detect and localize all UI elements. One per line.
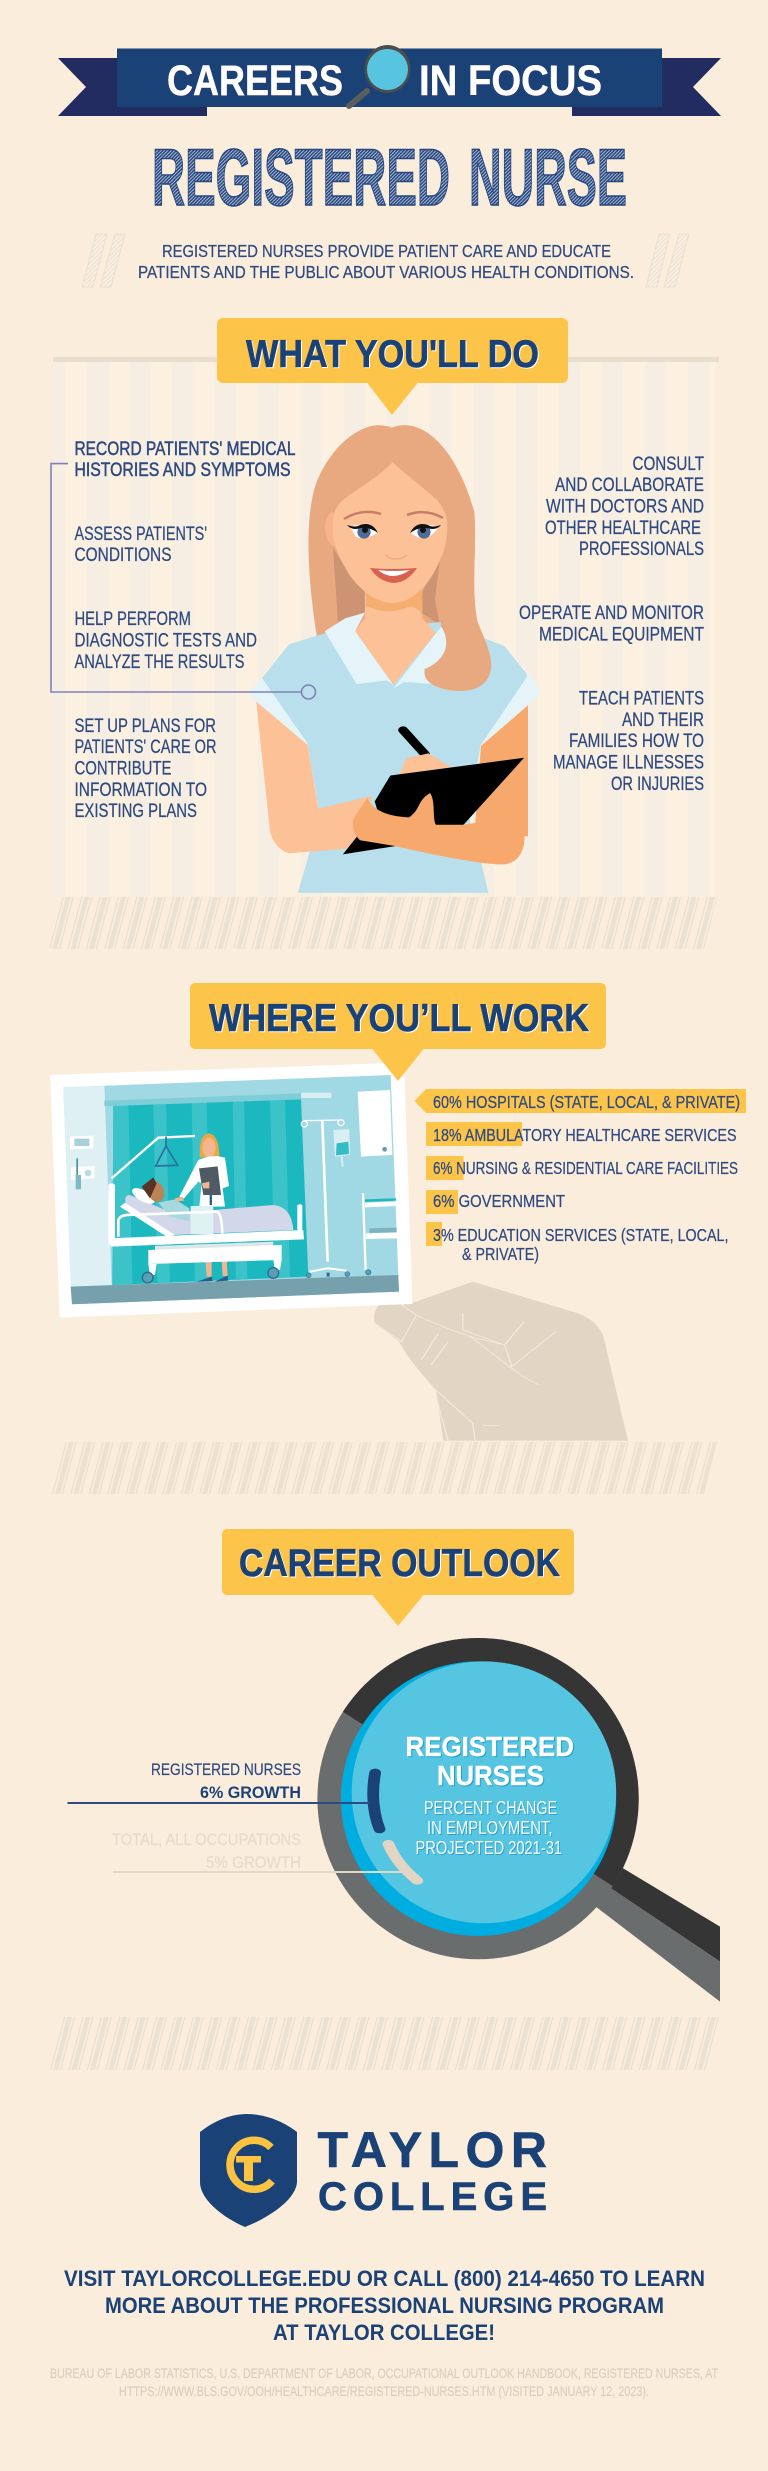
photo frame	[50, 1063, 412, 1318]
lens caption: PERCENT CHANGE	[424, 1797, 557, 1818]
stat label: registered nurses	[151, 1760, 301, 1802]
lens heading: REGISTERED	[406, 1731, 574, 1762]
task: assess conditions: CONDITIONS	[74, 545, 172, 566]
call to action	[64, 2266, 705, 2345]
icon: small magnifying glass	[349, 45, 410, 106]
stat label: registered nurses: 6% GROWTH	[200, 1783, 301, 1802]
decorative quote marks left	[82, 234, 125, 287]
task: care plans: PATIENTS' CARE OR	[74, 737, 216, 758]
logo shield	[200, 2114, 297, 2227]
nurse head	[325, 462, 447, 615]
task: consult and collaborate: PROFESSIONALS	[579, 539, 704, 560]
shadowed hair	[333, 548, 440, 625]
mouth	[370, 568, 417, 583]
hatched divider 3	[50, 2017, 719, 2070]
call to action: AT TAYLOR COLLEGE!	[273, 2320, 495, 2345]
task: assess conditions	[74, 524, 207, 566]
task: consult and collaborate: CONSULT	[632, 454, 704, 475]
callout connector	[51, 464, 316, 699]
wall	[63, 1075, 399, 1304]
section heading: career outlook	[222, 1529, 574, 1626]
stat label: all occupations	[112, 1830, 301, 1872]
section heading: where you'll work	[190, 983, 606, 1081]
nurse forearm and hand	[353, 793, 525, 864]
nurse writing hand	[399, 753, 456, 774]
task: record patients	[74, 439, 296, 481]
task: teach patients	[553, 688, 704, 795]
hand	[374, 1282, 628, 1441]
lens caption: IN EMPLOYMENT,	[427, 1817, 552, 1838]
wall cabinet	[358, 1090, 392, 1157]
task: care plans: SET UP PLANS FOR	[74, 716, 216, 737]
task: teach patients: FAMILIES HOW TO	[569, 731, 704, 752]
lens caption: PROJECTED 2021-31	[416, 1837, 562, 1858]
hospital room scene	[63, 1075, 399, 1304]
hatched divider 2	[52, 1442, 717, 1494]
floor	[71, 1275, 399, 1304]
task list: right column	[519, 454, 704, 795]
intro text: REGISTERED NURSES PROVIDE PATIENT CARE AND EDUCATE	[162, 241, 611, 261]
workplace list	[414, 1089, 746, 1264]
illustration: nurse with clipboard	[249, 425, 541, 893]
task: care plans	[74, 716, 216, 822]
eyebrows	[344, 512, 443, 519]
nurse upper right arm	[475, 705, 528, 837]
wall outlets	[70, 1136, 94, 1189]
lens glass	[341, 1661, 616, 1936]
task: consult and collaborate	[545, 454, 704, 560]
logo: taylor college	[200, 2114, 547, 2227]
pen	[403, 730, 425, 754]
hand and photo frame	[50, 1063, 628, 1441]
ear	[325, 512, 341, 549]
task: consult and collaborate: AND COLLABORATE	[555, 475, 704, 496]
face	[333, 462, 447, 603]
title: registered nurse: REGISTERED	[152, 133, 450, 223]
side trolley	[363, 1193, 397, 1275]
section heading: where you'll work: WHERE YOU’LL WORK	[209, 997, 589, 1040]
header ribbon	[58, 48, 721, 116]
item: education 3%: & PRIVATE)	[462, 1244, 539, 1264]
section heading: what you'll do: WHAT YOU'LL DO	[246, 333, 539, 376]
patient bed	[108, 1177, 304, 1283]
task: operate equipment	[519, 603, 704, 646]
stat label: all occupations: TOTAL, ALL OCCUPATIONS	[112, 1830, 301, 1849]
task: operate equipment: OPERATE AND MONITOR	[519, 603, 704, 624]
nurse sleeve cuffs	[249, 674, 541, 745]
stat label: all occupations: 5% GROWTH	[206, 1853, 301, 1872]
heading: careers in focus	[167, 57, 602, 105]
title: registered nurse: NURSE	[469, 133, 627, 223]
call to action: MORE ABOUT THE PROFESSIONAL NURSING PROGRAM	[105, 2293, 664, 2318]
task: teach patients: MANAGE ILLNESSES	[553, 752, 704, 774]
neck shadow	[366, 588, 422, 615]
lens heading: NURSES	[437, 1760, 544, 1791]
item: government 6%: 6% GOVERNMENT	[433, 1191, 565, 1211]
doctor	[179, 1133, 229, 1282]
decorative quote marks right	[646, 234, 689, 287]
leader lines	[68, 1803, 402, 1872]
task: operate equipment: MEDICAL EQUIPMENT	[539, 624, 704, 646]
task: care plans: INFORMATION TO	[74, 780, 207, 801]
lens caption	[416, 1797, 562, 1858]
lens heading	[406, 1731, 574, 1791]
intro text	[138, 241, 634, 282]
task: assess conditions: ASSESS PATIENTS'	[74, 524, 207, 545]
lens text	[406, 1731, 574, 1858]
illustration: hand holding photo	[50, 1063, 628, 1441]
lens rim	[317, 1638, 639, 1959]
section heading: career outlook: CAREER OUTLOOK	[239, 1542, 560, 1585]
eyes	[347, 524, 441, 539]
logo wordmark: COLLEGE	[318, 2175, 547, 2219]
task: care plans: CONTRIBUTE	[74, 758, 172, 780]
nurse shirt	[255, 622, 531, 893]
heading: careers in focus: CAREERS	[167, 57, 343, 105]
task: consult and collaborate: WITH DOCTORS AND	[546, 496, 704, 518]
nurse hair front lock	[425, 511, 491, 691]
task: diagnostic tests: HELP PERFORM	[74, 609, 191, 630]
task: teach patients: AND THEIR	[622, 710, 704, 731]
task: diagnostic tests	[74, 609, 257, 673]
nurse collar	[325, 613, 447, 689]
task: diagnostic tests: DIAGNOSTIC TESTS AND	[74, 630, 257, 652]
IV stand	[301, 1120, 350, 1278]
clipboard	[343, 758, 524, 854]
logo wordmark: TAYLOR	[318, 2122, 547, 2178]
nurse neck	[355, 589, 436, 685]
nose	[386, 555, 407, 559]
handle	[594, 1868, 720, 2002]
striped backdrop	[52, 357, 719, 896]
curtain	[104, 1093, 332, 1285]
nurse body	[249, 425, 541, 893]
task list: left column	[74, 439, 296, 822]
task: care plans: EXISTING PLANS	[74, 801, 197, 822]
stat label: registered nurses: REGISTERED NURSES	[151, 1760, 301, 1779]
task: record patients: RECORD PATIENTS' MEDICAL	[74, 439, 296, 460]
item: government 6%	[426, 1190, 565, 1214]
large magnifying glass	[317, 1638, 720, 2002]
intro text: PATIENTS AND THE PUBLIC ABOUT VARIOUS HEALTH CONDITIONS.	[138, 262, 634, 282]
logo wordmark	[318, 2122, 547, 2219]
task: consult and collaborate: OTHER HEALTHCARE	[545, 518, 701, 539]
hatched divider 1	[49, 897, 717, 949]
nurse hair	[308, 425, 491, 691]
section heading: what you'll do	[217, 318, 568, 415]
task: record patients: HISTORIES AND SYMPTOMS	[74, 460, 290, 481]
data arc: all occupations	[388, 1844, 417, 1881]
data arc: registered nurses	[373, 1773, 380, 1829]
source citation	[50, 2365, 718, 2399]
heading: careers in focus: IN FOCUS	[419, 57, 602, 105]
trapeze bar	[112, 1136, 195, 1178]
task: teach patients: OR INJURIES	[611, 774, 704, 795]
task: teach patients: TEACH PATIENTS	[579, 688, 704, 710]
call to action: VISIT TAYLORCOLLEGE.EDU OR CALL (800) 214-4650 TO LEARN	[64, 2266, 705, 2291]
item: education 3%	[426, 1222, 728, 1264]
nurse left arm	[256, 702, 372, 853]
task: diagnostic tests: ANALYZE THE RESULTS	[74, 652, 244, 673]
